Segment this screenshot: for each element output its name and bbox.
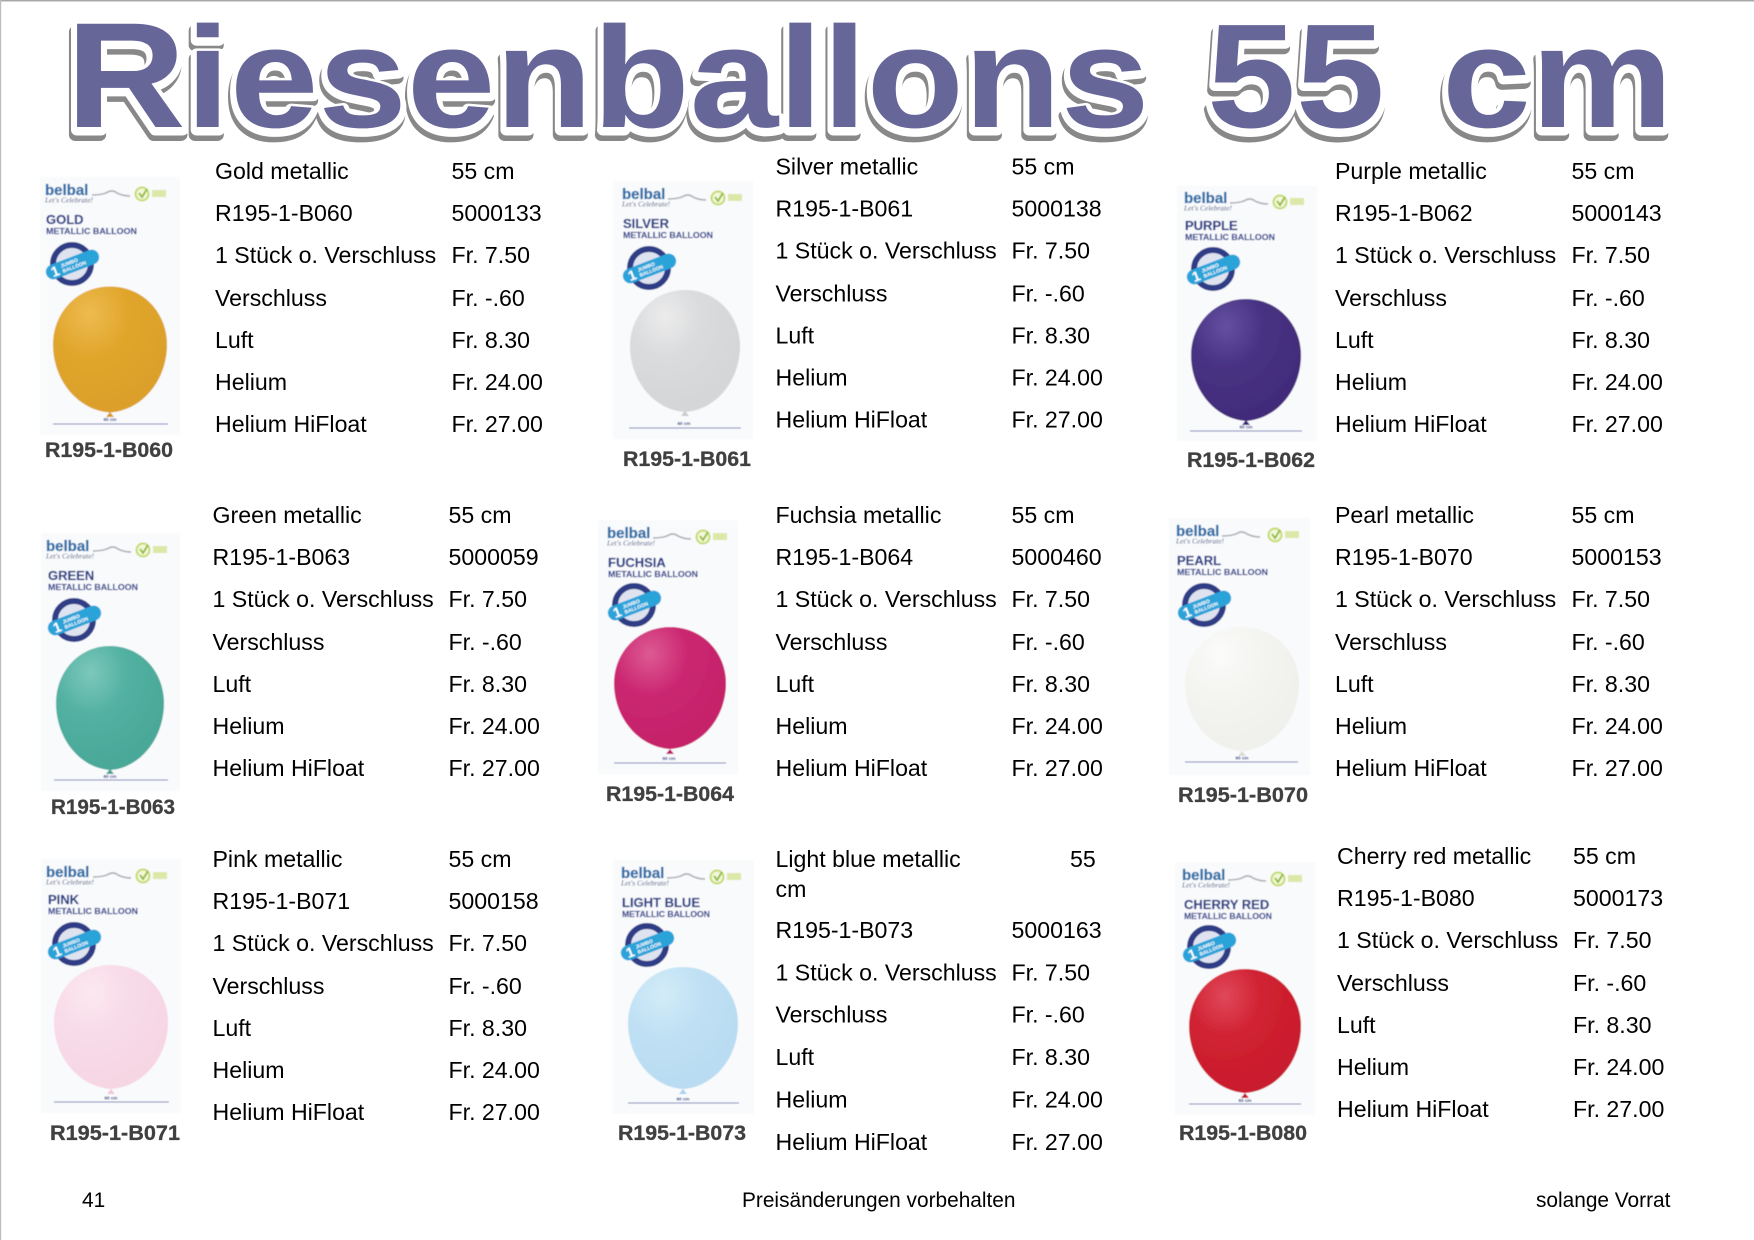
balloon card: silver: 60 cm [677,421,691,426]
balloon card: fuchsia: JUMBO [622,598,641,611]
product 6: pearl [1169,502,1663,807]
price list: cherry red [1337,843,1664,1122]
balloon card: pink: BALLOON [64,940,90,955]
price list: pearl: 5000153 [1572,544,1662,570]
price list: green: Fr. 24.00 [448,713,540,739]
balloon card: pearl: belbal [1176,523,1219,540]
balloon card: pink: 1 [51,942,64,960]
balloon card: cherry red: Let's Celebrate! [1181,880,1231,890]
balloon card: fuchsia: 60 cm [662,756,676,761]
balloon card: gold: belbal [45,182,88,199]
balloon card: pearl: METALLIC BALLOON [1177,567,1268,577]
price list: silver: 1 Stück o. Verschluss [776,238,997,264]
price list: gold: Fr. 24.00 [452,369,543,395]
title: cm [1442,0,1673,158]
price list: green: Helium [212,713,285,739]
balloon card: cherry red [1175,862,1315,1115]
price list: pink: Fr. -.60 [448,973,522,999]
price list: light blue: Fr. 8.30 [1012,1044,1090,1070]
price list: fuchsia [776,502,1103,781]
price list: cherry red: Fr. -.60 [1573,970,1646,996]
balloon card: green: JUMBO [62,613,81,626]
price list: light blue: cm [776,876,806,902]
price list: pearl: Fr. -.60 [1572,629,1645,655]
card code label: R195-1-B070 [1178,783,1308,807]
balloon card: silver: SILVER [623,216,670,231]
price list: purple: Purple metallic [1335,158,1487,184]
balloon card: fuchsia: METALLIC BALLOON [608,569,698,579]
price list: light blue [776,846,1103,1155]
balloon card: cherry red: belbal [1182,867,1225,884]
price list: pink: 1 Stück o. Verschluss [212,930,434,956]
price list: pink: Fr. 8.30 [448,1015,527,1041]
balloon card: pink [41,859,181,1113]
price list: purple: Helium HiFloat [1335,411,1487,437]
price list: cherry red: Helium HiFloat [1337,1096,1489,1122]
card code label: R195-1-B060 [45,438,173,462]
price list: pink: Verschluss [212,973,324,999]
price list: fuchsia: Fr. -.60 [1012,629,1085,655]
price list: gold: Gold metallic [215,158,349,184]
price list: fuchsia: Helium [776,713,848,739]
product 4: green [41,502,540,819]
price list: silver: Luft [776,322,815,348]
card code label: R195-1-B063 [51,795,175,819]
price list: pink: R195-1-B071 [212,888,350,914]
price list: green: Fr. 8.30 [448,671,527,697]
balloon card: gold: 60 cm [103,417,117,422]
price list: silver: Helium HiFloat [776,406,928,432]
balloon card: green: BALLOON [64,616,90,631]
price list: green: Fr. 7.50 [448,586,527,612]
price list: purple: 1 Stück o. Verschluss [1335,242,1556,268]
price list: light blue: Fr. -.60 [1012,1002,1085,1028]
balloon card: pearl: BALLOON [1194,601,1220,616]
balloon card: purple: BALLOON [1203,265,1229,280]
balloon card: light blue: LIGHT BLUE [622,895,700,910]
balloon card: light blue: 1 [624,943,637,961]
balloon card: green: Let's Celebrate! [45,552,95,560]
price list: fuchsia: Verschluss [776,629,887,655]
price list: pearl: Fr. 27.00 [1572,755,1663,781]
balloon card: light blue: Let's Celebrate! [620,878,670,888]
product 2: silver [613,154,1103,471]
title: 55 [1206,1,1383,167]
balloon card: gold: JUMBO [60,257,79,270]
balloon card: pearl: 1 [1181,603,1194,621]
card code label: R195-1-B080 [1179,1121,1307,1145]
price list: silver: Helium [776,364,848,390]
card code label: R195-1-B061 [623,447,751,471]
price list: light blue: 1 Stück o. Verschluss [776,960,997,986]
price list: silver: Fr. 8.30 [1012,322,1090,348]
balloon card: pearl [1169,518,1310,775]
price list: cherry red: R195-1-B080 [1337,885,1475,911]
price list: gold: R195-1-B060 [215,200,353,226]
balloon card: pink: belbal [46,864,89,881]
price list: gold [215,158,543,437]
title: Riesenballons [64,0,1148,167]
balloon card: gold: Let's Celebrate! [44,196,94,204]
price list: pearl: Helium [1335,713,1407,739]
price list: green: Fr. -.60 [448,629,522,655]
product 8: light blue [613,846,1103,1155]
product 9: cherry red [1175,843,1664,1145]
price list: pearl: Fr. 24.00 [1572,713,1663,739]
balloon card: light blue: METALLIC BALLOON [622,909,710,919]
balloon card: silver: 1 [626,266,639,284]
title: cm [1442,0,1673,161]
price list: fuchsia: Fr. 24.00 [1012,713,1103,739]
price list: pink: 5000158 [448,888,539,914]
price list: purple: 5000143 [1572,200,1662,226]
price list: silver [776,154,1103,432]
price list: cherry red: Fr. 7.50 [1573,927,1651,953]
price list: light blue: 55 [1070,846,1096,872]
price list: fuchsia: Luft [776,671,815,697]
price list: fuchsia: 5000460 [1012,544,1102,570]
price list: gold: 55 cm [452,158,515,184]
balloon card: green: METALLIC BALLOON [48,582,138,592]
balloon card: gold: BALLOON [62,260,88,275]
balloon card: gold: GOLD [46,212,84,227]
price list: light blue: 5000163 [1012,917,1102,943]
price list: gold: Fr. 27.00 [452,411,543,437]
price list: green: 55 cm [448,502,512,528]
balloon card: gold: 1 [49,262,62,280]
price list: pearl: Fr. 8.30 [1572,671,1650,697]
price list: light blue: Helium HiFloat [776,1129,928,1155]
price list: silver: R195-1-B061 [776,196,913,222]
price list: green [212,502,540,781]
price list: cherry red: Fr. 8.30 [1573,1012,1651,1038]
price list: pink [212,846,540,1125]
price list: purple: Verschluss [1335,285,1447,311]
price list: purple: Fr. 27.00 [1572,411,1663,437]
footer: price note: Preisänderungen vorbehalten [742,1189,1015,1212]
balloon card: silver: JUMBO [637,261,656,274]
price list: purple: Fr. 7.50 [1572,242,1650,268]
title [64,0,1673,167]
balloon card: pink: 60 cm [104,1096,118,1100]
price list: gold: Luft [215,327,254,353]
price list: silver: Fr. 24.00 [1012,364,1103,390]
price list: pink: Pink metallic [212,846,342,872]
price list: cherry red: Helium [1337,1054,1409,1080]
price list: pink: Helium [212,1057,285,1083]
price list: pink: Luft [212,1015,252,1041]
price list: light blue: Fr. 7.50 [1012,960,1090,986]
price list: pink: Fr. 7.50 [448,930,527,956]
price list: cherry red: Verschluss [1337,970,1449,996]
price list: purple: Fr. 8.30 [1572,327,1650,353]
balloon card: fuchsia: FUCHSIA [608,555,666,570]
product 5: fuchsia [598,502,1103,806]
price list: light blue: Light blue metallic [776,846,961,872]
price list: fuchsia: Fr. 27.00 [1012,755,1103,781]
balloon card: fuchsia: BALLOON [624,601,650,616]
product 3: purple [1177,158,1663,472]
balloon card: green: GREEN [48,568,94,583]
title: 55 [1207,0,1385,162]
balloon card: fuchsia: 1 [611,603,624,621]
balloon card: fuchsia: Let's Celebrate! [606,538,656,548]
price list: gold: Fr. 8.30 [452,327,530,353]
price list: purple [1335,158,1663,437]
price list: purple: Luft [1335,327,1374,353]
price list: silver: 5000138 [1012,196,1102,222]
price list: green: Verschluss [212,629,324,655]
price list: cherry red: 55 cm [1573,843,1636,869]
price list: silver: Verschluss [776,280,887,306]
price list: silver: Fr. 27.00 [1012,406,1103,432]
price list: light blue: Fr. 24.00 [1012,1086,1103,1112]
price list: green: Green metallic [212,502,362,528]
price list: silver: Fr. 7.50 [1012,238,1090,264]
balloon card: gold: METALLIC BALLOON [46,226,137,236]
price list: purple: Fr. -.60 [1572,285,1645,311]
balloon card: cherry red: JUMBO [1197,940,1216,953]
balloon card: green [41,533,180,791]
balloon card: cherry red: 1 [1186,945,1199,963]
price list: cherry red: Luft [1337,1012,1376,1038]
price list: fuchsia: Fuchsia metallic [776,502,941,528]
price list: pearl: Helium HiFloat [1335,755,1487,781]
price list: pearl: Luft [1335,671,1374,697]
balloon card: fuchsia [598,520,738,774]
balloon card: purple: JUMBO [1201,262,1220,275]
balloon card: light blue: 60 cm [676,1096,690,1102]
balloon card: purple [1177,186,1317,441]
price list: fuchsia: 55 cm [1012,502,1075,528]
price list: light blue: Fr. 27.00 [1012,1129,1103,1155]
price list: light blue: Luft [776,1044,815,1070]
balloon card: purple: 1 [1190,267,1203,285]
balloon card: purple: PURPLE [1185,218,1238,233]
price list: cherry red: 5000173 [1573,885,1663,911]
balloon card: silver: belbal [622,186,665,203]
balloon card: pink: Let's Celebrate! [45,878,95,886]
card code label: R195-1-B073 [618,1121,746,1145]
price list: pearl: R195-1-B070 [1335,544,1473,570]
price list: pearl: 55 cm [1572,502,1635,528]
price list: light blue: R195-1-B073 [776,917,913,943]
price list: gold: Helium [215,369,287,395]
price list: purple: 55 cm [1572,158,1635,184]
balloon card: cherry red: METALLIC BALLOON [1184,911,1272,921]
balloon card: fuchsia: belbal [607,525,650,542]
price list: fuchsia: Fr. 7.50 [1012,586,1090,612]
balloon card: purple: Let's Celebrate! [1183,204,1233,212]
balloon card: light blue [613,860,754,1114]
balloon card: silver: METALLIC BALLOON [623,230,713,240]
balloon card: gold [40,177,180,435]
card code label: R195-1-B062 [1187,448,1315,472]
price list: purple: Fr. 24.00 [1572,369,1663,395]
price list: fuchsia: Fr. 8.30 [1012,671,1090,697]
balloon card: pink: METALLIC BALLOON [48,906,138,916]
price list: silver: 55 cm [1012,154,1075,180]
balloon card: pearl: JUMBO [1192,598,1211,611]
price list: pearl: 1 Stück o. Verschluss [1335,586,1556,612]
balloon card: green: 1 [51,618,64,636]
price list: green: R195-1-B063 [212,544,350,570]
balloon card: pearl: PEARL [1177,553,1221,568]
balloon card: green: belbal [46,538,89,555]
price list: purple: Helium [1335,369,1407,395]
balloon card: purple: 60 cm [1239,424,1253,430]
product 7: pink [41,846,540,1145]
price list: pink: Helium HiFloat [212,1099,365,1125]
price list: silver: Silver metallic [776,154,918,180]
balloon card: purple: belbal [1184,190,1227,207]
price list: fuchsia: R195-1-B064 [776,544,913,570]
footer: page number: 41 [82,1189,105,1212]
price list: green: 1 Stück o. Verschluss [212,586,434,612]
price list: light blue: Helium [776,1086,848,1112]
price list: cherry red: Cherry red metallic [1337,843,1531,869]
price list: green: Luft [212,671,252,697]
balloon card: cherry red: CHERRY RED [1184,897,1269,912]
price list: purple: R195-1-B062 [1335,200,1473,226]
card code label: R195-1-B064 [606,782,734,806]
price list: gold: Verschluss [215,285,327,311]
price list: silver: Fr. -.60 [1012,280,1085,306]
balloon card: pearl: Let's Celebrate! [1175,536,1225,546]
balloon card: green: 60 cm [103,774,117,779]
price list: gold: 5000133 [452,200,542,226]
price list: green: Fr. 27.00 [448,755,540,781]
balloon card: pearl: 60 cm [1235,756,1249,760]
price list: cherry red: Fr. 24.00 [1573,1054,1664,1080]
price list: pearl: Fr. 7.50 [1572,586,1650,612]
price list: pearl: Verschluss [1335,629,1447,655]
price list: green: Helium HiFloat [212,755,365,781]
price list: pink: Fr. 24.00 [448,1057,540,1083]
price list: gold: Fr. 7.50 [452,242,530,268]
balloon card: light blue: BALLOON [637,941,663,956]
price list: pearl: Pearl metallic [1335,502,1474,528]
price list: light blue: Verschluss [776,1002,887,1028]
balloon card: silver [613,181,753,439]
footer: stock note: solange Vorrat [1536,1189,1671,1212]
balloon card: purple: METALLIC BALLOON [1185,232,1275,242]
title: cm [1440,5,1672,166]
price list: pink: 55 cm [448,846,512,872]
balloon card: silver: BALLOON [639,264,665,279]
product 1: gold [40,158,543,462]
price list: pearl [1335,502,1663,781]
price list: green: 5000059 [448,544,539,570]
price list: gold: Fr. -.60 [452,285,525,311]
price list: fuchsia: Helium HiFloat [776,755,928,781]
balloon card: pink: JUMBO [62,937,81,950]
balloon card: cherry red: BALLOON [1199,943,1225,958]
balloon card: silver: Let's Celebrate! [621,200,671,208]
price list: gold: 1 Stück o. Verschluss [215,242,436,268]
price list: gold: Helium HiFloat [215,411,367,437]
price list: pink: Fr. 27.00 [448,1099,540,1125]
price list: cherry red: Fr. 27.00 [1573,1096,1664,1122]
balloon card: pink: PINK [48,892,80,907]
balloon card: light blue: belbal [621,865,664,882]
balloon card: cherry red: 60 cm [1238,1098,1252,1103]
price list: fuchsia: 1 Stück o. Verschluss [776,586,997,612]
price list: cherry red: 1 Stück o. Verschluss [1337,927,1558,953]
title: Riesenballons [66,0,1150,162]
balloon card: light blue: JUMBO [635,938,654,951]
card code label: R195-1-B071 [50,1121,180,1145]
